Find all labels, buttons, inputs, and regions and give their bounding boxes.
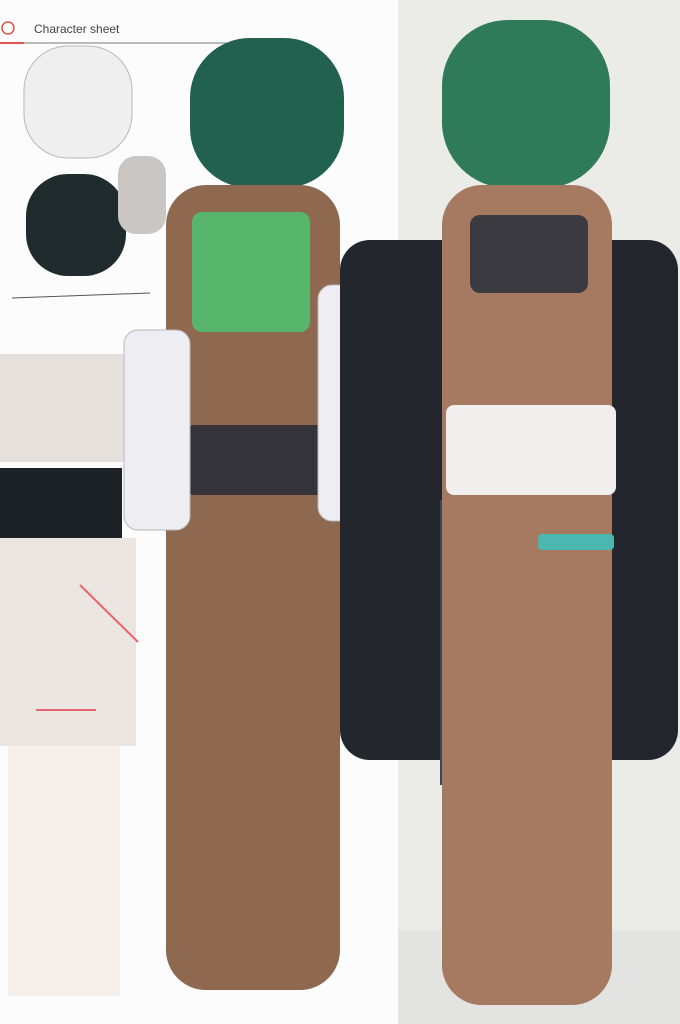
panel: upper sketch placeholder, light	[24, 46, 132, 158]
divider: notes line	[12, 293, 150, 298]
header: sheet label	[0, 22, 228, 43]
swatch: coat lining colour	[440, 500, 610, 785]
panel: lower sketch column	[8, 746, 120, 996]
swatch: green hair colour	[442, 20, 610, 188]
panel: dark swatch card	[0, 468, 122, 538]
panel: right sheet background	[398, 0, 680, 1024]
panel: right floor tone	[398, 930, 680, 1024]
panel: lower sketch placeholder, dark	[26, 174, 126, 276]
placeholder: right figure area	[340, 20, 678, 1005]
swatch: dark garment colour	[186, 425, 332, 495]
swatch: skin-tone column	[442, 185, 612, 1005]
swatch: green garment colour	[192, 212, 310, 332]
swatch: white jacket colour, left	[124, 330, 190, 530]
swatch: dark coat colour	[340, 240, 678, 760]
swatch: multicolour band	[538, 534, 614, 550]
swatch: dark garment colour	[470, 215, 588, 293]
accent: red sketch mark	[36, 585, 138, 710]
panel: small sketch placeholder	[118, 156, 166, 234]
panel: left sheet background	[0, 0, 398, 1024]
swatch: white jacket colour, right	[318, 285, 380, 521]
swatch: green top colour	[190, 38, 344, 188]
placeholder: centre figure area	[124, 38, 380, 990]
swatch: white garment colour	[446, 405, 616, 495]
swatch: skin-tone column	[166, 185, 340, 990]
panel: sketch card	[0, 538, 136, 746]
header: sheet label: Character sheet	[34, 22, 120, 36]
panel: notes card	[0, 354, 134, 462]
